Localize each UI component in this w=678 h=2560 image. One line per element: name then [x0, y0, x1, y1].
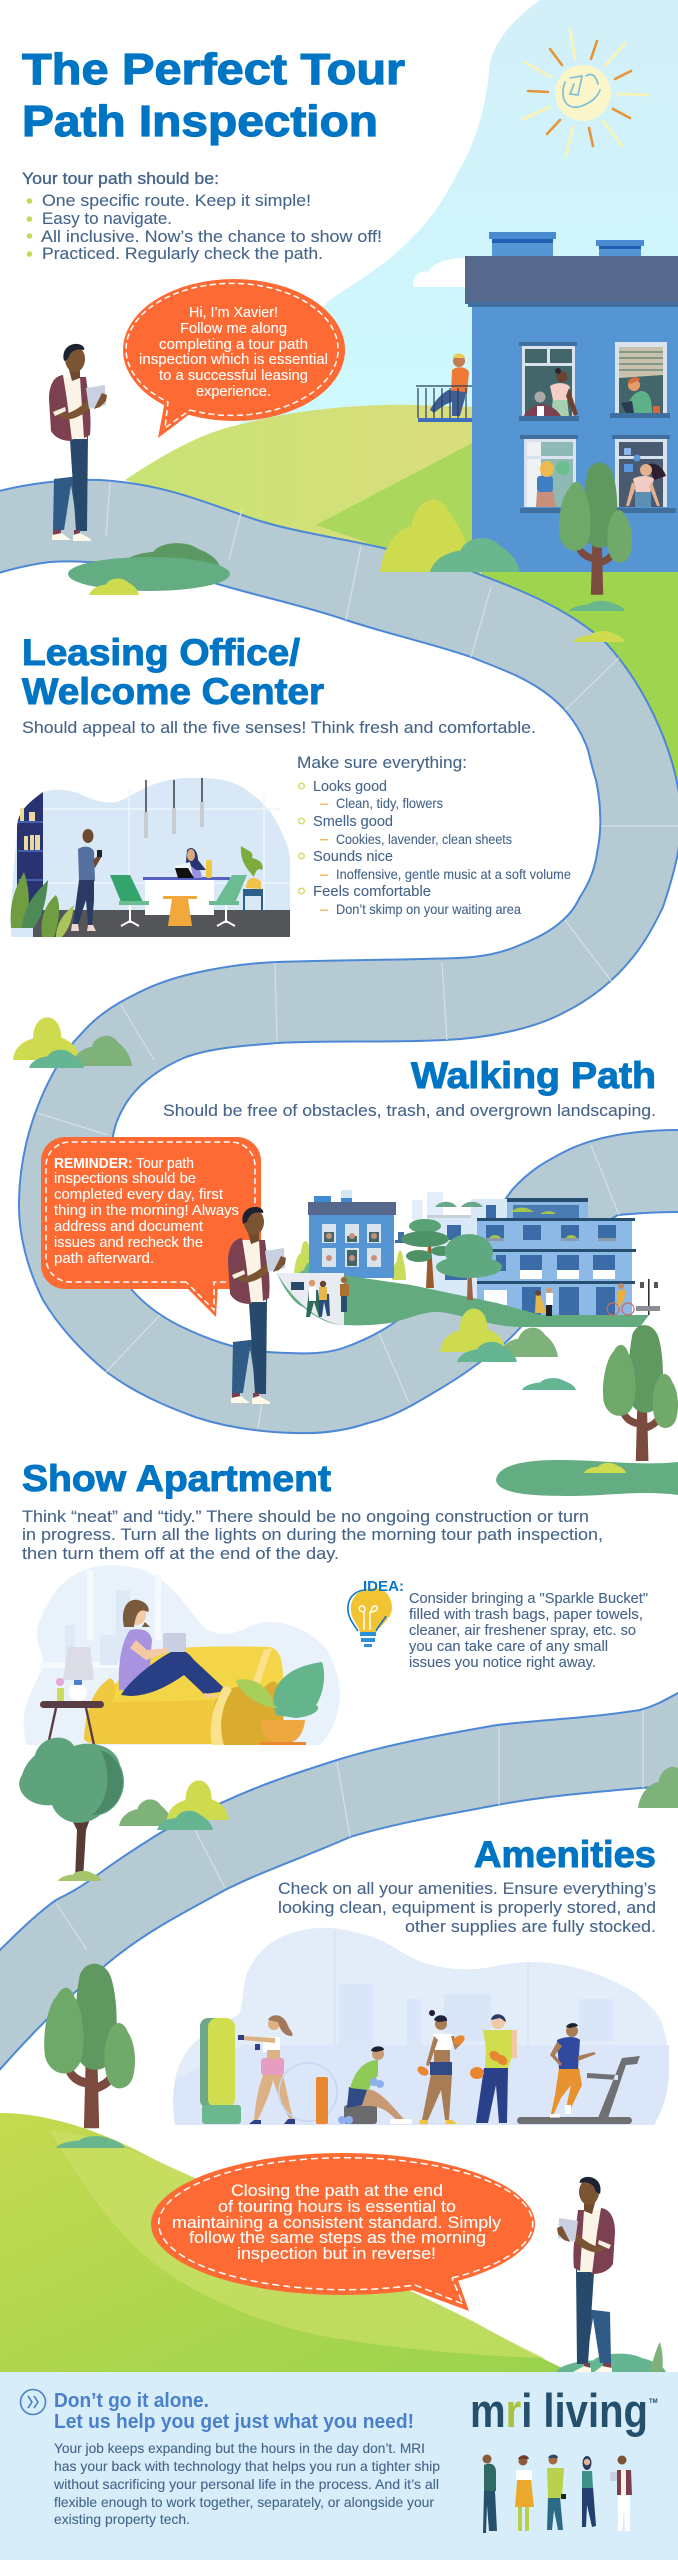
text: amenities intro: looking clean, equipment is properly stored, and: [278, 1899, 656, 1917]
text: amenities intro: other supplies are fully stocked.: [405, 1918, 656, 1936]
bush group: lower: [119, 1767, 678, 1830]
speech bubble: reminder: REMINDER: Tour path: [54, 1155, 194, 1172]
speech bubble: intro: inspection which is essential: [139, 351, 328, 368]
logo: mri living: TM: [649, 2399, 658, 2405]
walking residents: [306, 1277, 349, 1317]
speech bubble: reminder: path afterward.: [54, 1250, 154, 1267]
speech bubble: closing: [151, 2153, 535, 2311]
icon: sun: [523, 29, 648, 156]
speech bubble: reminder: thing in the morning! Always: [54, 1202, 239, 1219]
heading: walking path: Walking Path: [411, 1055, 656, 1096]
balcony with sitting resident: [416, 354, 472, 422]
speech bubble: closing: maintaining a consistent standard. Simply: [172, 2213, 502, 2232]
illustration: leasing office: [11, 778, 290, 937]
checklist: make sure everything: Cookies, lavender, clean sheets: [336, 831, 512, 847]
man with phone: [71, 829, 102, 931]
walkway: [277, 1273, 344, 1325]
text: walking path intro: Should be free of obstacles, trash, and overgrown landscaping.: [163, 1102, 656, 1120]
speech bubble: reminder: inspections should be: [54, 1170, 196, 1187]
chairs: [110, 875, 247, 926]
footer text: Your job keeps expanding but the hours in the day don’t. MRI: [54, 2440, 425, 2456]
checklist: make sure everything: Clean, tidy, flowers: [336, 795, 443, 811]
idea callout: issues you notice right away.: [409, 1654, 596, 1671]
idea callout: you can take care of any small: [409, 1638, 608, 1655]
window: man with tablet: [610, 342, 670, 418]
heading: amenities: Amenities: [474, 1834, 656, 1875]
icon: double chevron: [20, 2390, 46, 2414]
grass tufts: [569, 601, 625, 642]
road: winding tour path: [0, 480, 678, 1433]
speech bubble: intro: experience.: [196, 383, 271, 400]
speech bubble: intro: completing a tour path: [159, 336, 308, 353]
text: amenities intro: Check on all your amenities. Ensure everything’s: [278, 1880, 656, 1898]
bush on path: [68, 543, 230, 595]
speech bubble: intro: Hi, I’m Xavier!: [189, 304, 278, 321]
text: amenities intro: [278, 1880, 656, 1936]
speech bubble: intro: Follow me along: [180, 320, 287, 337]
intro checklist: All inclusive. Now’s the chance to show off!: [41, 228, 382, 246]
bushes at building base: [380, 500, 520, 572]
footer text: without sacrificing your personal life in the process. And it’s all: [53, 2476, 439, 2492]
illustration: gym amenities: [173, 1928, 669, 2125]
tree: round lower left: [19, 1738, 124, 1881]
footer text: flexible enough to work together, separately, or alongside your: [54, 2494, 434, 2510]
woman boxing: [238, 2015, 295, 2124]
intro checklist: Your tour path should be:: [22, 170, 219, 188]
title: The Perfect Tour: [22, 45, 405, 94]
text: show apartment intro: Think “neat” and “tidy.” There should be no ongoing construction or turn: [22, 1508, 589, 1526]
pine tree: [401, 1219, 453, 1288]
bush group: upper left: [13, 1017, 132, 1068]
desk: [143, 877, 230, 926]
checklist: make sure everything: Sounds nice: [313, 848, 393, 865]
footer heading: Let us help you get just what you need!: [54, 2411, 414, 2433]
heading: leasing office: Welcome Center: [22, 671, 324, 712]
grass tuft by tree: [56, 2136, 125, 2148]
footer text: existing property tech.: [54, 2511, 190, 2527]
figure 4: [582, 2456, 596, 2527]
sofa: [84, 1646, 284, 1745]
character: Xavier at closing: [557, 2177, 615, 2374]
speech bubble: reminder: [41, 1137, 261, 1317]
heading: leasing office: [22, 632, 324, 712]
modern building: [427, 1198, 636, 1316]
background sky: [238, 0, 678, 560]
street lamp and bench: [636, 1279, 660, 1315]
intro checklist: [22, 170, 382, 263]
character: Xavier on walking path: [228, 1207, 286, 1404]
title: Path Inspection: [22, 97, 378, 146]
footer panel: [0, 2372, 678, 2560]
building-side residents and cyclist: [535, 1283, 634, 1316]
sign: [291, 1282, 304, 1290]
intro checklist: One specific route. Keep it simple!: [42, 192, 311, 210]
footer text: has your back with technology that helps you run a tighter ship: [54, 2458, 440, 2474]
heading: leasing office: Leasing Office/: [22, 632, 300, 673]
window: woman with phone: [520, 435, 584, 513]
round tree: [436, 1234, 502, 1300]
intro checklist: Easy to navigate.: [42, 210, 172, 228]
hula hoop and mat: [279, 2063, 337, 2124]
footer heading: Don’t go it alone.: [54, 2390, 209, 2412]
woman with dumbbells: [416, 2010, 466, 2124]
logo: mri living: mri living: [470, 2384, 648, 2437]
text: show apartment intro: then turn them off at the end of the day.: [22, 1545, 339, 1563]
title: [22, 45, 405, 146]
speech bubble: closing: inspection but in reverse!: [237, 2244, 436, 2263]
checklist: make sure everything: Don’t skimp on your waiting area: [336, 901, 521, 917]
idea callout: Consider bringing a "Sparkle Bucket": [409, 1590, 648, 1607]
green ground: [277, 1273, 649, 1327]
ground patch with tree: [496, 1325, 678, 1496]
figure 2: [515, 2455, 534, 2531]
speech bubble: reminder: address and document: [54, 1218, 204, 1235]
table and lamp: [40, 1647, 104, 1745]
intro checklist: Practiced. Regularly check the path.: [42, 245, 323, 263]
icon: cloud: [413, 258, 465, 287]
shrubs at bottom right: [556, 2342, 666, 2372]
figure 5: [610, 2456, 632, 2531]
plant: left: [11, 872, 74, 937]
punching bag: [200, 2018, 241, 2124]
speech bubble: intro: to a successful leasing: [159, 367, 308, 384]
idea callout: filled with trash bags, paper towels,: [409, 1606, 643, 1623]
speech bubble: closing: follow the same steps as the morning: [189, 2228, 486, 2247]
speech bubble: closing: Closing the path at the end: [231, 2181, 443, 2200]
bush group: mid: [440, 1308, 558, 1362]
illustration: show apartment sofa: [24, 1565, 340, 1745]
text: show apartment intro: [22, 1508, 603, 1563]
plant: right: [241, 846, 263, 915]
checklist: make sure everything: Looks good: [313, 778, 387, 795]
character: Xavier with tablet: [49, 344, 107, 541]
tree: tall lower left: [44, 1964, 135, 2128]
woman at desk: [175, 848, 212, 878]
runner on treadmill: [517, 2023, 640, 2124]
checklist: make sure everything: [297, 754, 571, 917]
tree by building: [559, 462, 632, 595]
woman with tablet: [119, 1600, 223, 1698]
heading: show apartment: Show Apartment: [22, 1458, 331, 1499]
man with dumbbells: [470, 2014, 517, 2123]
icon: light bulb: [348, 1588, 392, 1647]
balcony small: [395, 1232, 408, 1243]
figure 1: [482, 2454, 497, 2533]
rooftop umbrellas: [435, 1202, 483, 1207]
bottom green hill: [0, 2113, 571, 2372]
footer figures: [482, 2454, 632, 2533]
left bushes: [294, 1241, 406, 1284]
text: leasing office intro: Should appeal to all the five senses! Think fresh and comfortable.: [22, 719, 536, 737]
speech bubble: reminder: completed every day, first: [54, 1186, 224, 1203]
window: two residents: [519, 342, 579, 421]
figure 3: [547, 2455, 566, 2530]
background towers: [412, 1192, 443, 1220]
speech bubble: closing: of touring hours is essential to: [218, 2197, 456, 2216]
speech bubble: reminder: issues and recheck the: [54, 1234, 203, 1251]
hills: [125, 405, 678, 810]
small shrub: [522, 1378, 576, 1390]
footer text: [53, 2440, 440, 2527]
road: lower path segment: [0, 1687, 678, 2075]
potted plant: [236, 1662, 324, 1745]
checklist: make sure everything: Inoffensive, gentle music at a soft volume: [336, 866, 571, 882]
text: show apartment intro: in progress. Turn all the lights on during the morning tour path inspection,: [22, 1526, 603, 1544]
footer heading: [54, 2390, 414, 2433]
man seated with dumbbell: [338, 2046, 412, 2124]
idea callout: cleaner, air freshener spray, etc. so: [409, 1622, 636, 1639]
idea callout: [348, 1578, 648, 1671]
illustration: apartment community: [277, 1190, 660, 1327]
checklist: make sure everything: Smells good: [313, 813, 393, 830]
speech bubble: intro: [123, 279, 345, 438]
small apartment building: [308, 1190, 396, 1278]
checklist: make sure everything: Make sure everything:: [297, 754, 467, 772]
window: woman at window: [612, 435, 676, 513]
apartment building: [465, 232, 678, 572]
idea callout: IDEA:: [363, 1578, 404, 1595]
checklist: make sure everything: Feels comfortable: [313, 883, 431, 900]
